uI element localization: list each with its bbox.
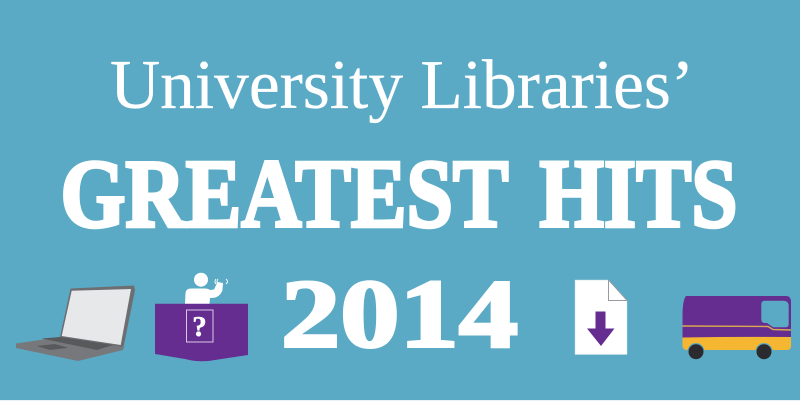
year: 2014: 2014 bbox=[281, 260, 518, 368]
icon: document download bbox=[575, 280, 627, 354]
heading: Greatest Hits: HITS bbox=[540, 140, 738, 247]
icon: reference desk with librarian: ? bbox=[192, 311, 207, 343]
title: University Libraries': University Libraries’ bbox=[110, 47, 694, 124]
question mark sign bbox=[186, 310, 213, 342]
librarian figure bbox=[185, 273, 228, 304]
icon: laptop bbox=[16, 286, 135, 361]
heading: Greatest Hits: GREATEST bbox=[60, 140, 508, 247]
icon: delivery van bbox=[682, 296, 791, 360]
icon: reference desk with librarian bbox=[155, 273, 248, 361]
desk bbox=[155, 304, 248, 361]
